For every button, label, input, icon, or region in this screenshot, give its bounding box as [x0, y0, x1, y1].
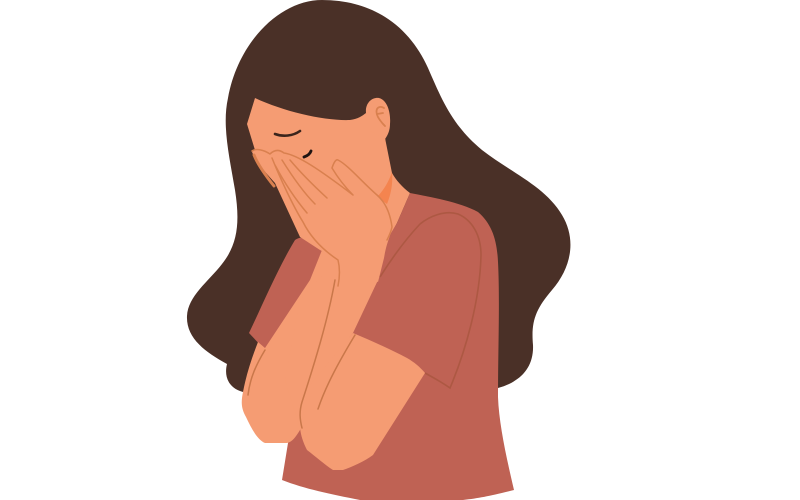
- hands: [252, 150, 392, 286]
- ear: [366, 98, 390, 139]
- arm contour lines: [248, 280, 355, 428]
- finger outlines: [252, 150, 392, 286]
- hair: [187, 0, 570, 420]
- hand shadow edge: [254, 155, 274, 186]
- sleeve seam: [380, 213, 481, 388]
- shirt: [249, 193, 514, 500]
- palm and fingers: [252, 150, 392, 282]
- upper right arm: [285, 244, 385, 428]
- left forearm: [242, 250, 378, 443]
- left sleeve: [249, 238, 330, 350]
- right forearm: [300, 333, 425, 470]
- closed eye: [275, 131, 300, 136]
- shirt body: [282, 193, 514, 500]
- second eye: [304, 151, 311, 157]
- neck shadow: [377, 172, 392, 204]
- face: [247, 98, 389, 215]
- neck and face: [247, 98, 410, 260]
- neck: [320, 130, 410, 260]
